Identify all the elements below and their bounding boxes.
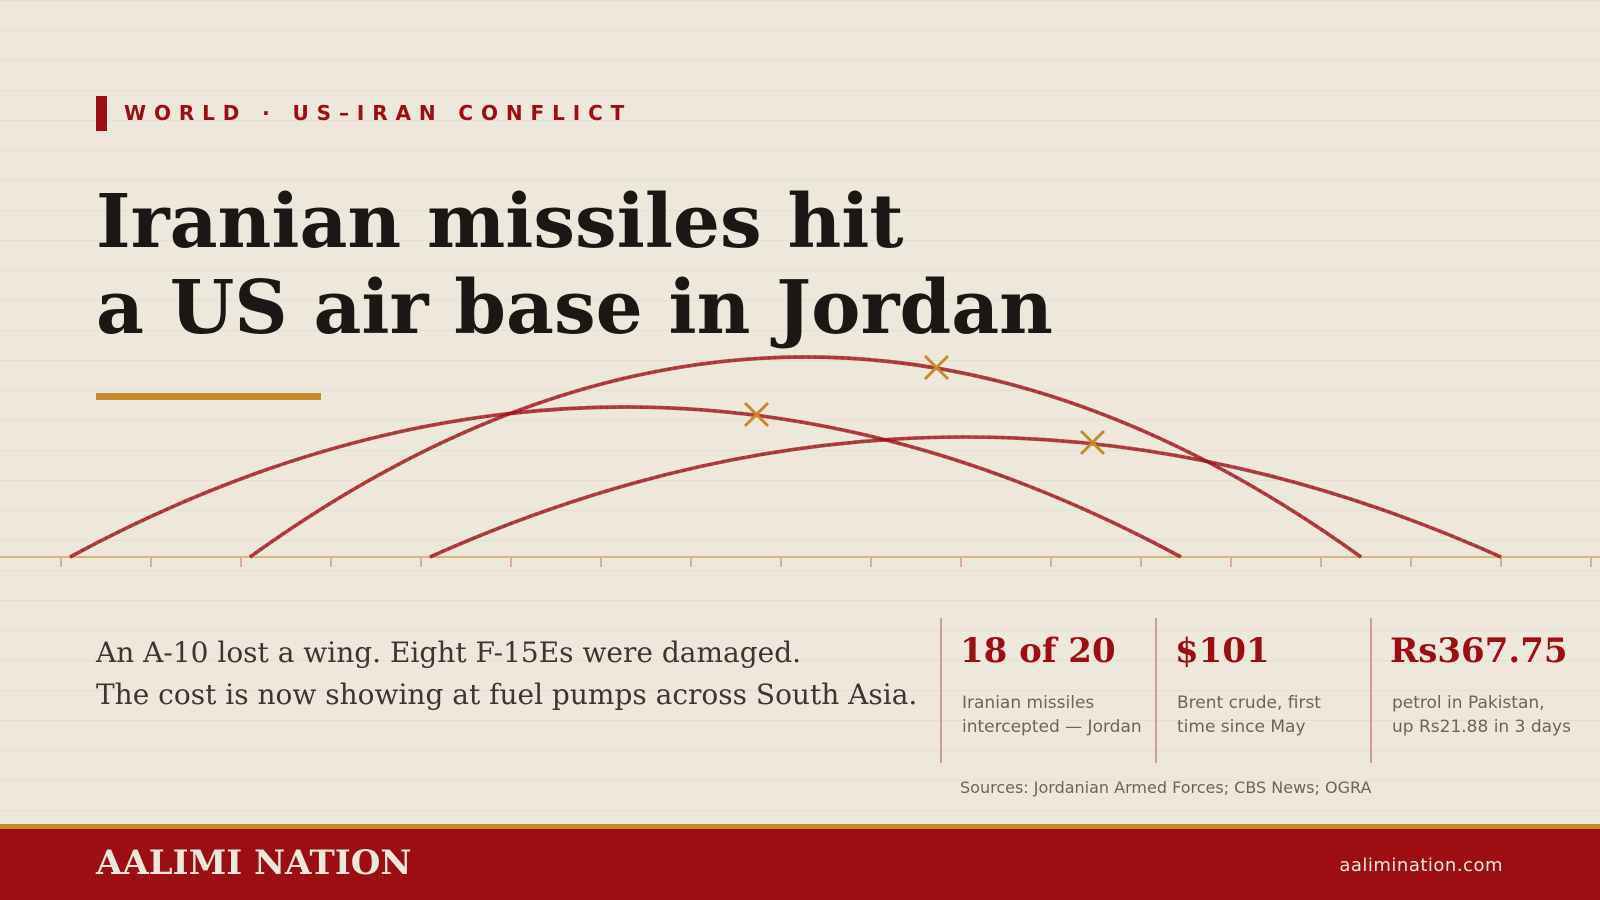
missile arc 2 xyxy=(250,357,1361,557)
stat label xyxy=(1392,693,1571,737)
stat value: 18 of 20 xyxy=(960,631,1116,671)
title xyxy=(96,179,1053,351)
ground axis with ticks xyxy=(0,556,1600,567)
stat label: petrol in Pakistan, xyxy=(1392,693,1545,713)
stat label xyxy=(1177,693,1321,737)
body text xyxy=(95,636,917,711)
stat: Brent crude xyxy=(1155,618,1321,763)
title underline accent xyxy=(96,393,321,400)
stat: missiles intercepted xyxy=(940,618,1142,763)
stat label: Brent crude, first xyxy=(1177,693,1321,713)
interception marker 1 xyxy=(745,403,768,426)
interception marker 2 xyxy=(925,356,948,379)
footer band xyxy=(0,824,1600,900)
stat label: up Rs21.88 in 3 days xyxy=(1392,717,1571,737)
stat value: Rs367.75 xyxy=(1390,631,1568,671)
footer url: aalimination.com xyxy=(1339,855,1503,876)
stat label: Iranian missiles xyxy=(962,693,1094,713)
title: Iranian missiles hit xyxy=(96,179,904,265)
eyebrow: section label xyxy=(96,96,632,131)
stat: petrol price xyxy=(1370,618,1571,763)
missile trajectory chart xyxy=(0,356,1600,567)
stat value: $101 xyxy=(1175,631,1270,671)
eyebrow accent bar xyxy=(96,96,107,131)
missile arc 1 xyxy=(70,407,1181,557)
stat label: time since May xyxy=(1177,717,1306,737)
stat label: intercepted — Jordan xyxy=(962,717,1142,737)
eyebrow text: WORLD · US–IRAN CONFLICT xyxy=(124,101,632,125)
interception marker 3 xyxy=(1081,431,1104,454)
footer brand: AALIMI NATION xyxy=(95,843,411,883)
title: a US air base in Jordan xyxy=(96,265,1053,351)
stat label xyxy=(962,693,1142,737)
body text: The cost is now showing at fuel pumps across South Asia. xyxy=(96,678,917,711)
body text: An A-10 lost a wing. Eight F-15Es were damaged. xyxy=(95,636,801,669)
sources: Sources: Jordanian Armed Forces; CBS News; OGRA xyxy=(960,778,1371,797)
missile arc 3 xyxy=(430,437,1501,557)
